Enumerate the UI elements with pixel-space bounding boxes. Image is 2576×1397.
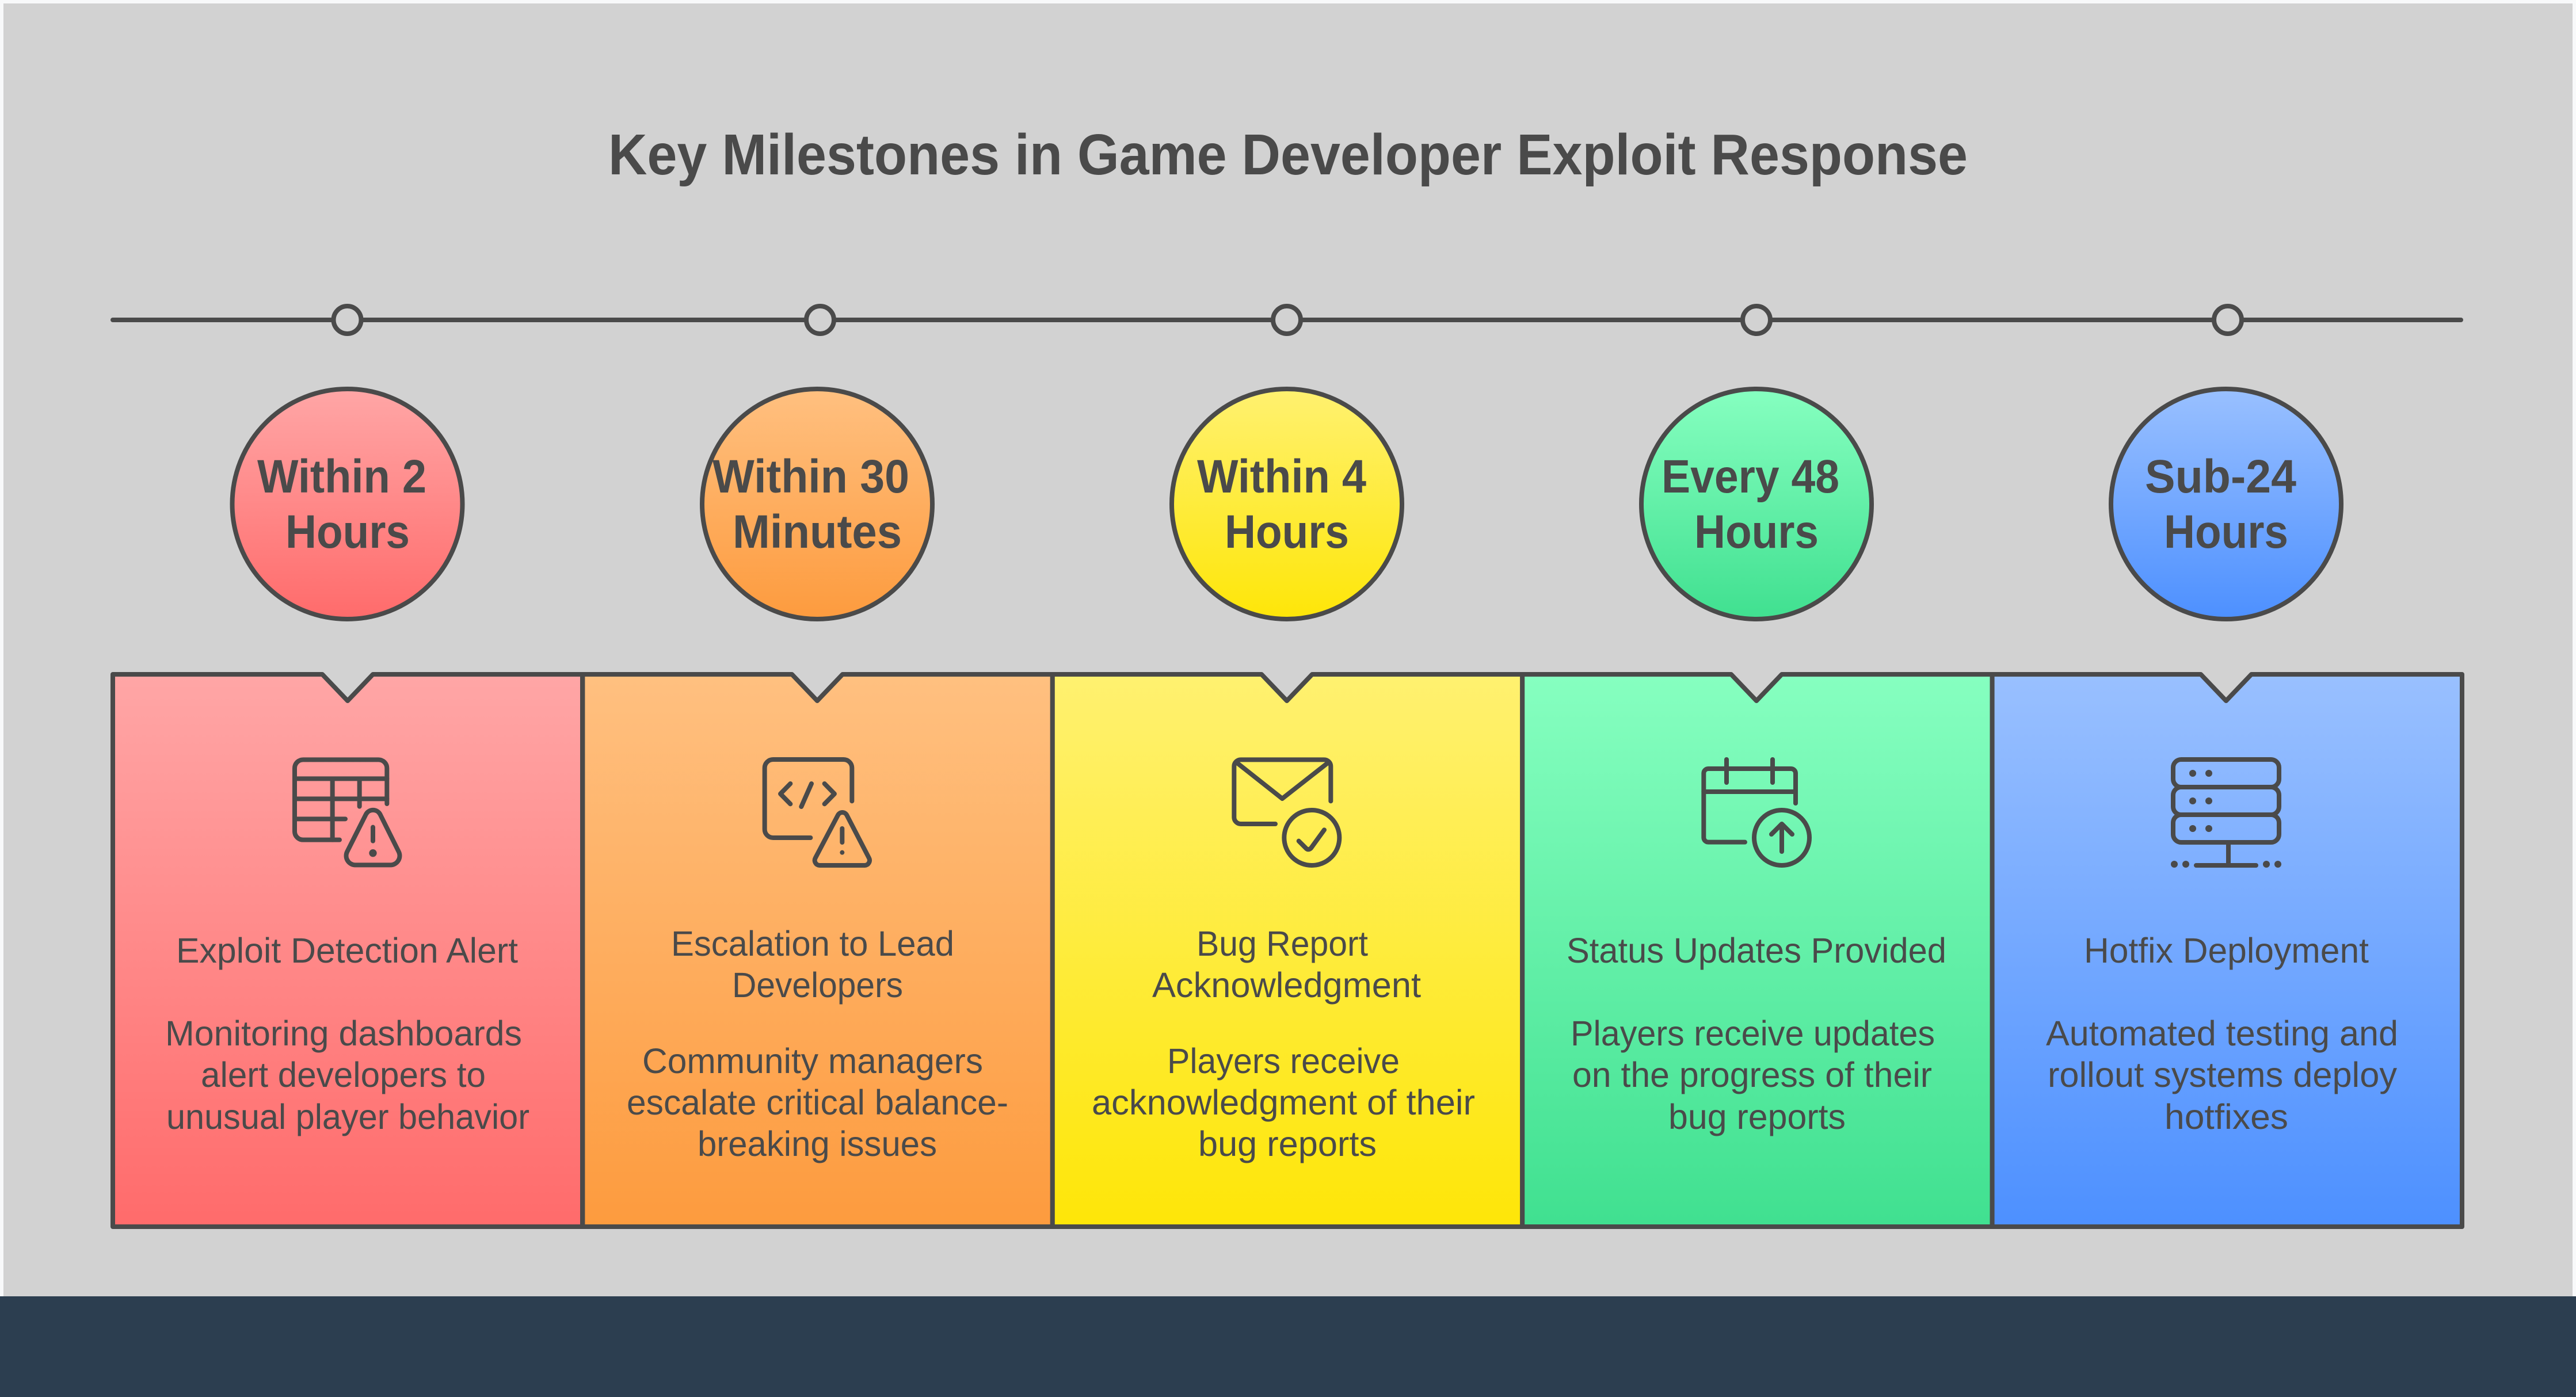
footer band (0, 1296, 2576, 1397)
text: Exploit Detection Alert description: alert developers to (201, 1055, 486, 1094)
milestone circle: Within 4 Hours: Within 4 (1197, 451, 1366, 503)
icon: server stack (2171, 759, 2281, 868)
panel: Status Updates Provided (1522, 674, 1992, 1227)
panel: Escalation to Lead Developers (582, 674, 1053, 1227)
milestone circle: Sub-24 Hours: Hours (2164, 506, 2288, 558)
milestone circle: Within 4 Hours: Hours (1225, 506, 1349, 558)
text: Exploit Detection Alert description: Monitoring dashboards (165, 1014, 522, 1053)
text: Hotfix Deployment description: Hotfix Deployment (2084, 931, 2369, 970)
milestone circle: Within 2 Hours: Hours (285, 506, 410, 558)
timeline with milestone nodes (113, 306, 2461, 334)
text: Exploit Detection Alert description (165, 931, 529, 1136)
text: Hotfix Deployment description: Automated testing and (2046, 1014, 2398, 1053)
panel: Exploit Detection Alert (113, 674, 582, 1227)
text: Exploit Detection Alert description: Exploit Detection Alert (176, 931, 518, 970)
text: Escalation to Lead Developers description: Developers (732, 965, 903, 1005)
icon: envelope with check mark (1234, 759, 1339, 865)
icon: calendar with upload arrow (1704, 759, 1809, 865)
milestone circle: Within 30 Minutes: Minutes (733, 506, 902, 558)
text: Bug Report Acknowledgment description: bug reports (1198, 1124, 1377, 1163)
milestone circle: Within 4 Hours (1172, 389, 1402, 619)
text: Bug Report Acknowledgment description: Acknowledgment (1152, 965, 1421, 1005)
panel: Bug Report Acknowledgment (1053, 674, 1522, 1227)
milestone circle: Every 48 Hours: Hours (1694, 506, 1819, 558)
title: Key Milestones in Game Developer Exploit Response (608, 123, 1968, 187)
milestone circle: Every 48 Hours (1641, 389, 1872, 619)
text: Bug Report Acknowledgment description: Bug Report (1196, 924, 1368, 963)
text: Hotfix Deployment description (2046, 931, 2398, 1136)
text: Status Updates Provided description: Status Updates Provided (1567, 931, 1946, 970)
milestone circle: Within 30 Minutes (702, 389, 932, 619)
milestone circle: Within 2 Hours (233, 389, 463, 619)
milestone circle: Within 2 Hours: Within 2 (257, 451, 426, 503)
milestone circle: Sub-24 Hours: Sub-24 (2145, 451, 2296, 503)
text: Exploit Detection Alert description: unusual player behavior (166, 1097, 529, 1136)
text: Status Updates Provided description (1567, 931, 1946, 1136)
text: Status Updates Provided description: Players receive updates (1571, 1014, 1935, 1053)
text: Escalation to Lead Developers description: escalate critical balance- (627, 1083, 1008, 1122)
panel: Hotfix Deployment (1992, 674, 2462, 1227)
text: Bug Report Acknowledgment description: acknowledgment of their (1092, 1083, 1475, 1122)
milestone circle: Within 30 Minutes: Within 30 (712, 451, 909, 503)
text: Escalation to Lead Developers description: Community managers (642, 1041, 983, 1081)
milestone circle: Every 48 Hours: Every 48 (1662, 451, 1839, 503)
milestone circle: Sub-24 Hours (2111, 389, 2341, 619)
text: Status Updates Provided description: bug reports (1668, 1097, 1846, 1136)
text: Escalation to Lead Developers description: Escalation to Lead (671, 924, 954, 963)
text: Bug Report Acknowledgment description (1092, 924, 1475, 1163)
text: Bug Report Acknowledgment description: Players receive (1167, 1041, 1400, 1081)
text: Hotfix Deployment description: hotfixes (2165, 1097, 2288, 1136)
text: Escalation to Lead Developers description (627, 924, 1008, 1163)
icon: table with warning triangle (295, 759, 399, 865)
text: Escalation to Lead Developers description: breaking issues (698, 1124, 937, 1163)
icon: code window with warning triangle (765, 759, 870, 865)
text: Hotfix Deployment description: rollout systems deploy (2048, 1055, 2397, 1094)
text: Status Updates Provided description: on the progress of their (1572, 1055, 1932, 1094)
